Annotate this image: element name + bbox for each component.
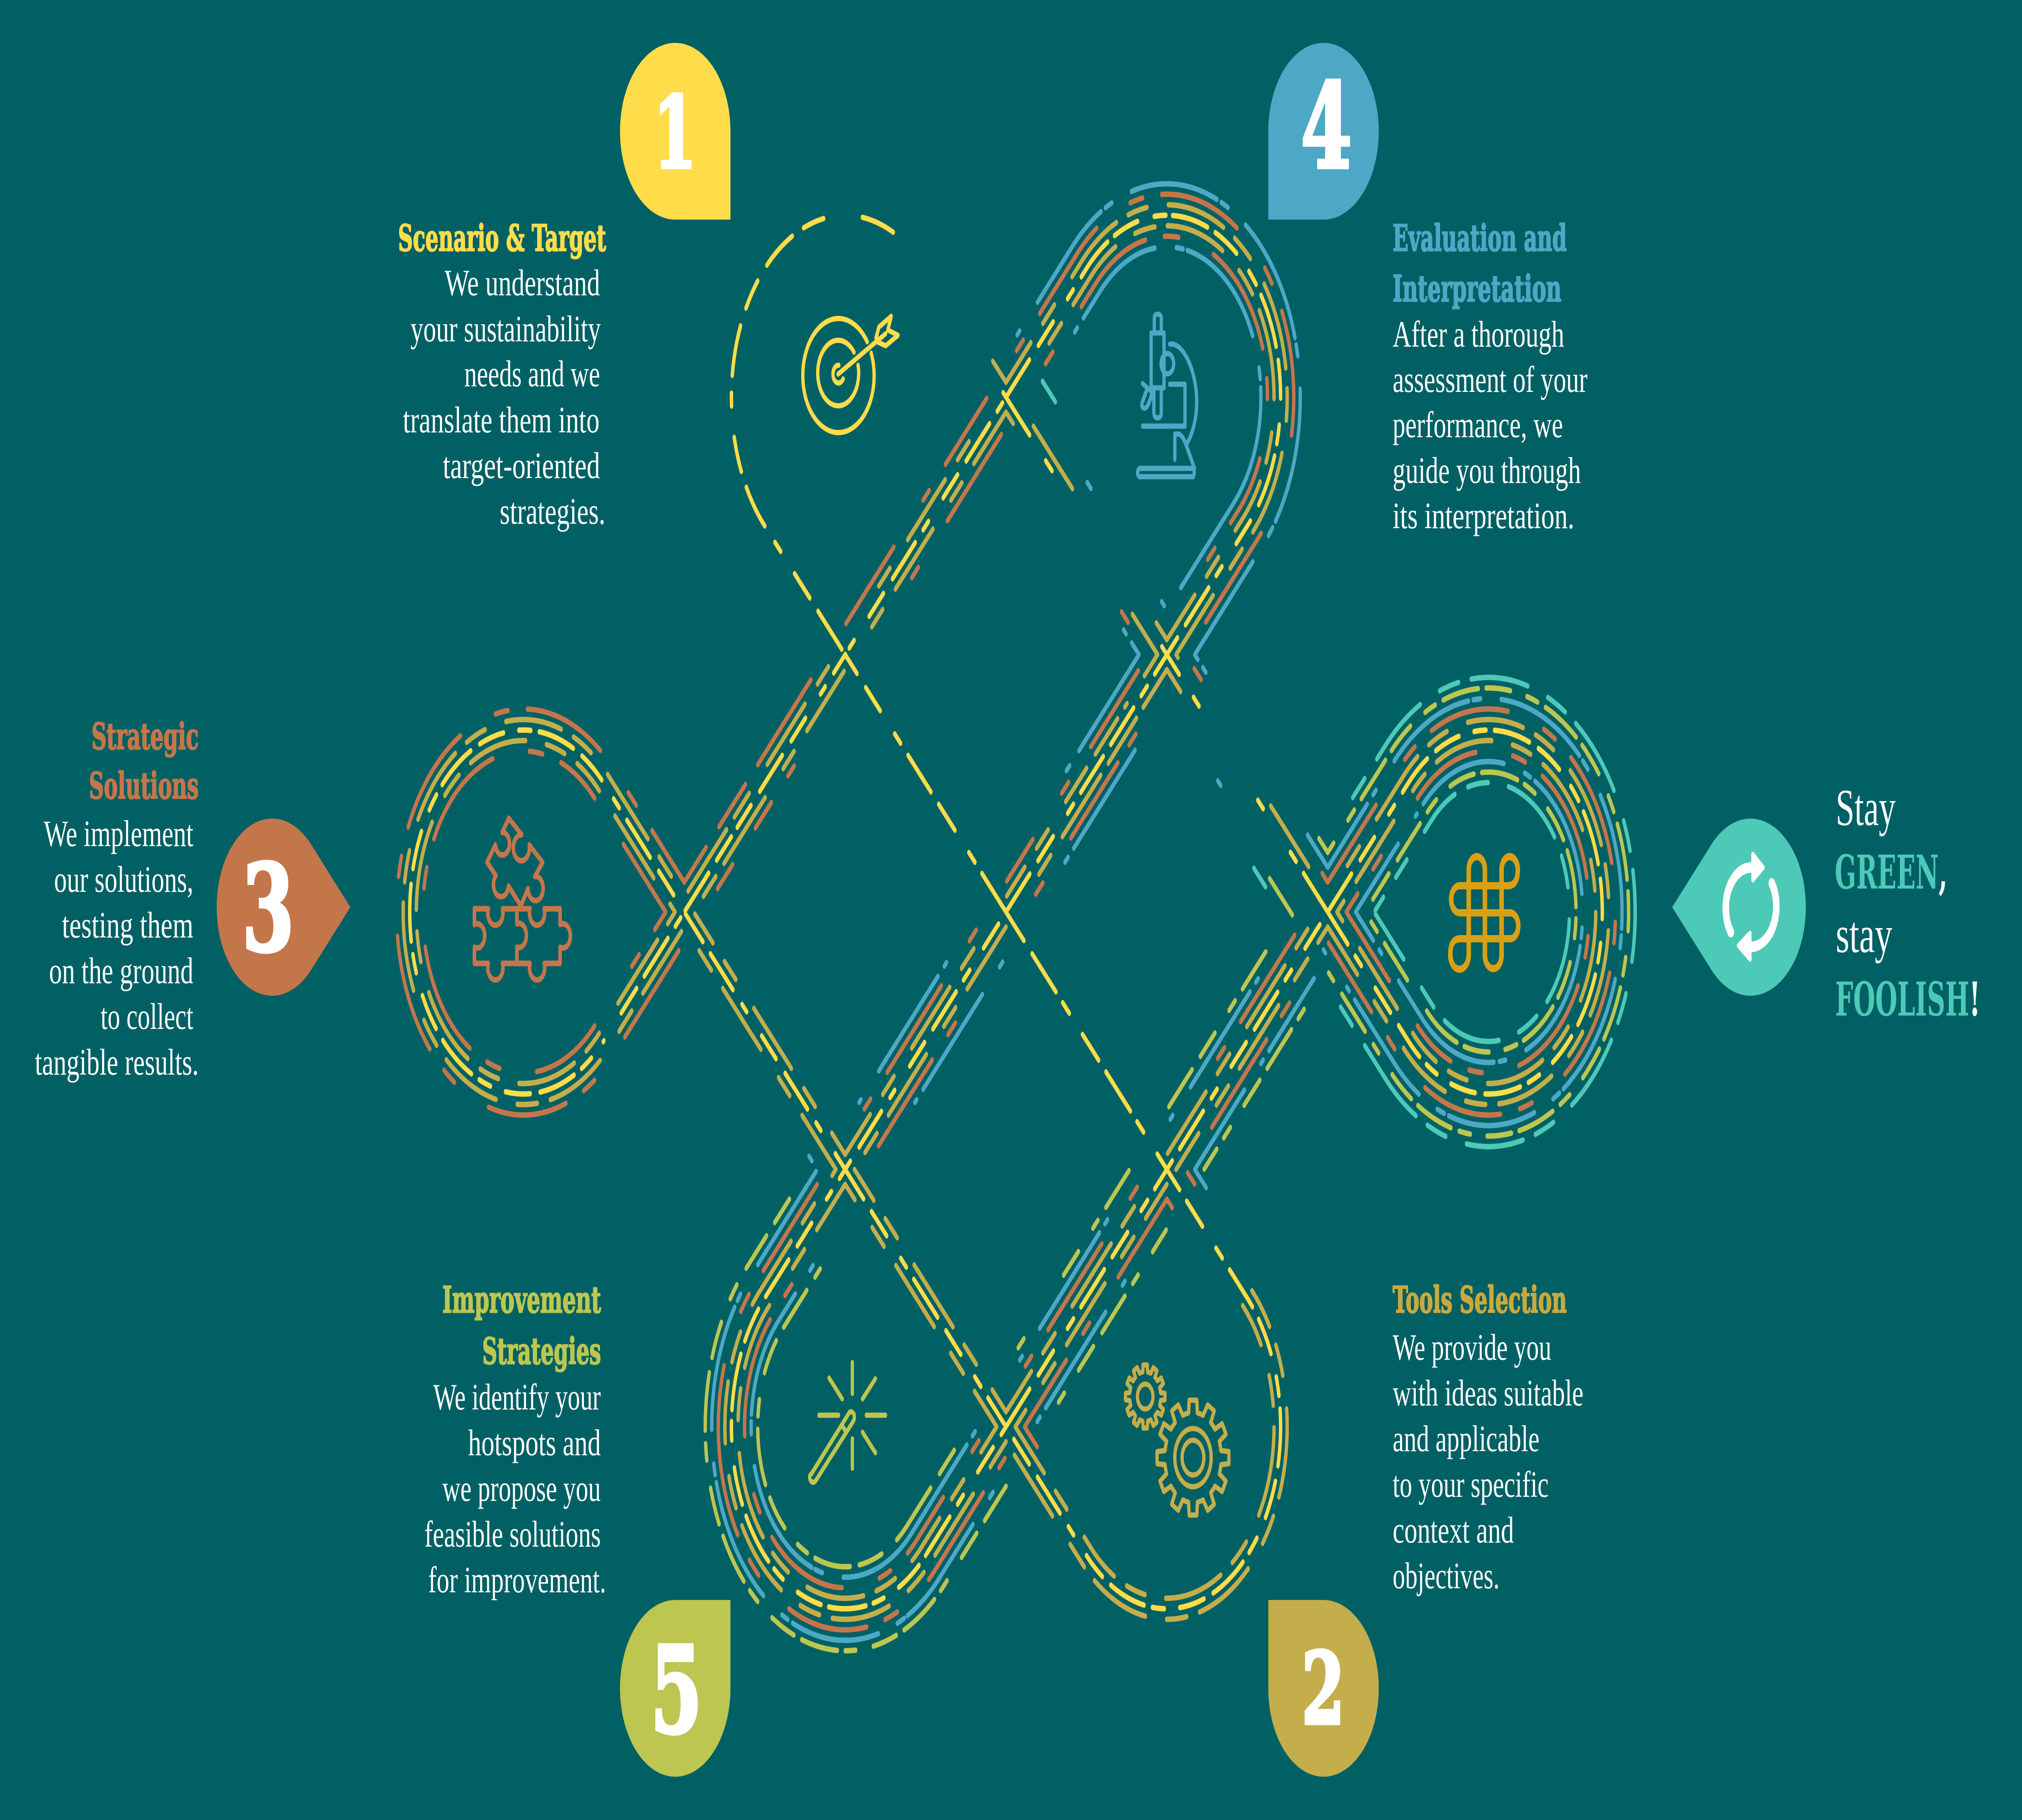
body: we propose you [442, 1468, 601, 1509]
body: objectives. [1393, 1555, 1500, 1596]
body: our solutions, [54, 859, 193, 900]
heading [89, 715, 199, 807]
celtic knot diagram [344, 95, 1696, 1744]
body: your sustainability [410, 308, 601, 349]
body: We understand [444, 262, 600, 303]
text block: Evaluation and Interpretation [1393, 217, 1588, 536]
body: We implement [44, 813, 193, 854]
heading [1393, 217, 1567, 310]
loop 4: seven strands with blue [1072, 95, 1356, 548]
badge 1 [620, 43, 730, 220]
body [1393, 1327, 1584, 1596]
body: for improvement. [428, 1559, 606, 1600]
heading: Solutions [89, 764, 199, 807]
body: tangible results. [35, 1041, 199, 1083]
badge 5: 5 [650, 1620, 702, 1761]
body: and applicable [1393, 1418, 1540, 1459]
body [424, 1376, 606, 1600]
straight teal strands [996, 290, 1489, 1078]
body: needs and we [464, 353, 600, 394]
body: context and [1393, 1509, 1514, 1551]
body: with ideas suitable [1393, 1372, 1584, 1414]
text block: Improvement Strategies [424, 1278, 606, 1600]
straight blue strands [590, 246, 1489, 1684]
straight olive strands [525, 141, 1489, 1682]
loop 5: nine strands with lime [647, 1268, 944, 1744]
loop 6: eleven strands with teal [1281, 580, 1696, 1244]
body: performance, we [1393, 404, 1563, 445]
slogan: Stay green, stay foolish [1835, 779, 1980, 1027]
loop 3: yellow, olive and orange strands [344, 625, 703, 1199]
badge 1: 1 [654, 75, 696, 191]
heading: Evaluation and [1393, 217, 1567, 260]
icon: puzzle pieces [474, 818, 570, 980]
slogan: Stay green, stay foolish: FOOLISH! [1835, 972, 1980, 1027]
body: its interpretation. [1393, 495, 1574, 536]
text block: Strategic Solutions [35, 715, 199, 1083]
text block: Tools Selection [1393, 1278, 1584, 1596]
icon: command knot [1450, 857, 1518, 969]
straight lime strands [743, 503, 1474, 1671]
badge 3: 3 [242, 838, 294, 979]
body: After a thorough [1393, 313, 1564, 355]
heading: Tools Selection [1393, 1278, 1567, 1321]
heading: Improvement [442, 1278, 601, 1321]
body: testing them [62, 904, 193, 946]
body [1393, 313, 1588, 536]
heading: Interpretation [1393, 267, 1561, 310]
badge 4: 4 [1301, 58, 1352, 196]
text block: Scenario & Target [398, 217, 606, 532]
badge 5 [620, 1600, 730, 1777]
badge 3 [217, 819, 350, 996]
body: assessment of your [1393, 359, 1588, 400]
heading: Scenario & Target [398, 217, 606, 260]
badge 2: 2 [1302, 1631, 1345, 1747]
body: strategies. [500, 491, 605, 532]
body: on the ground [49, 950, 193, 991]
heading: Strategies [482, 1330, 601, 1373]
slogan: Stay green, stay foolish: Stay [1836, 779, 1896, 837]
body [403, 262, 605, 532]
body: We identify your [433, 1376, 601, 1418]
badge: recycle arrows [1672, 819, 1806, 996]
icon: gears [1125, 1365, 1229, 1515]
straight orange strands [540, 164, 1485, 1676]
loop 1: single yellow strand [684, 140, 926, 526]
body: We provide you [1393, 1327, 1551, 1368]
heading: Strategic [91, 715, 199, 758]
heading [442, 1278, 601, 1373]
icon: magic wand [810, 1363, 886, 1482]
slogan: Stay green, stay foolish: GREEN, [1835, 845, 1948, 900]
body: hotspots and [468, 1422, 601, 1463]
body: to collect [101, 996, 193, 1037]
slogan: Stay green, stay foolish: stay [1836, 906, 1893, 964]
straight yellow strands [534, 155, 1489, 1683]
badge 2 [1268, 1600, 1379, 1777]
icon: microscope [1138, 314, 1197, 477]
icon: target with arrow [803, 316, 898, 432]
body: feasible solutions [424, 1513, 601, 1555]
body: translate them into [403, 399, 599, 440]
badge 4 [1268, 43, 1379, 220]
body: target-oriented [443, 445, 600, 486]
body: to your specific [1393, 1464, 1548, 1505]
body [35, 813, 199, 1083]
loop 2: yellow and olive strands [1082, 1291, 1337, 1699]
body: guide you through [1393, 450, 1581, 491]
